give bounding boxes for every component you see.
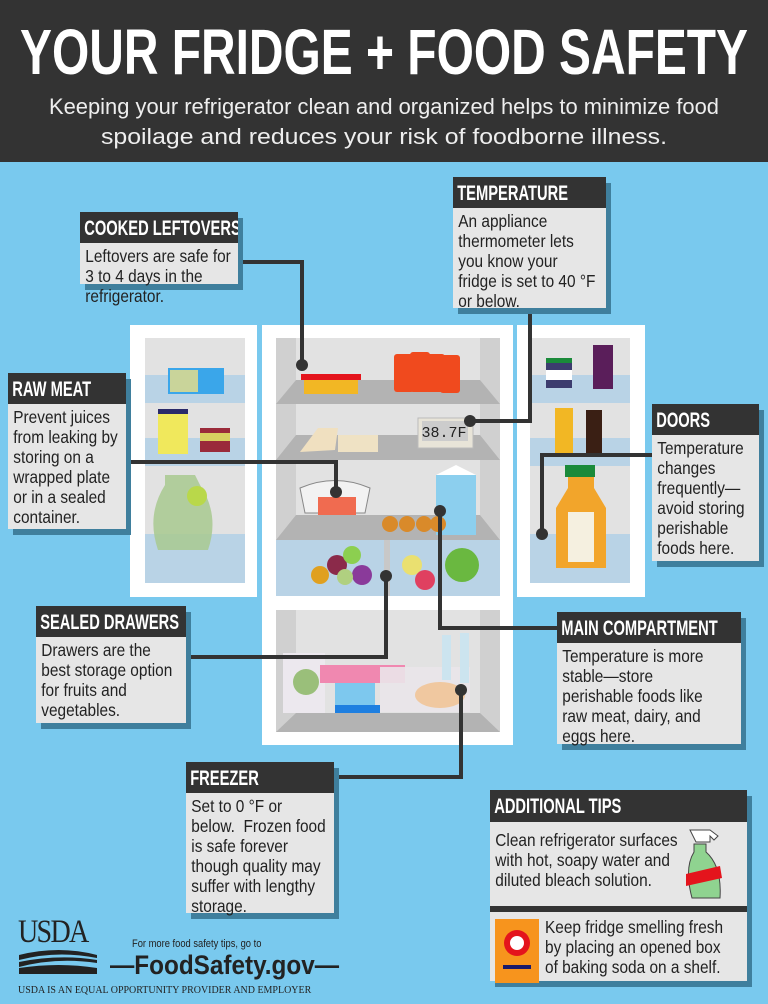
callout: doors: DOORS <box>656 409 710 432</box>
callout: raw meat: from leaking by <box>13 427 118 447</box>
callout: raw meat <box>8 373 126 529</box>
callout: freezer: is safe forever <box>191 836 288 856</box>
tip: cleaning: diluted bleach solution. <box>495 870 652 890</box>
header banner <box>0 0 768 162</box>
title: spoilage and reduces your risk of foodborne illness. <box>101 124 667 149</box>
callout: main compartment: stable—store <box>562 666 653 686</box>
callout: doors: perishable <box>657 518 728 538</box>
title: Keeping your refrigerator clean and organized helps to minimize food <box>49 94 719 119</box>
callout: sealed drawers <box>36 606 186 723</box>
callout: temperature: or below. <box>458 291 520 311</box>
thermometer <box>418 418 473 448</box>
callout: raw meat: storing on a <box>13 447 94 467</box>
callout: temperature: fridge is set to 40 °F <box>458 271 595 291</box>
callout: raw meat: RAW MEAT <box>12 378 91 401</box>
callout: doors: changes <box>657 458 716 478</box>
food items <box>153 345 613 713</box>
callout: sealed drawers: best storage option <box>41 660 172 680</box>
callout: cooked leftovers: 3 to 4 days in the <box>85 266 203 286</box>
title <box>20 16 748 149</box>
callout: doors: Temperature <box>657 438 744 458</box>
FoodSafety.gov link: For more food safety tips, go to <box>132 938 261 950</box>
callout: additional tips: ADDITIONAL TIPS <box>494 795 621 818</box>
tip: cleaning: Clean refrigerator surfaces <box>495 830 678 850</box>
callout: main compartment: raw meat, dairy, and <box>562 706 701 726</box>
callout: sealed drawers: for fruits and <box>41 680 127 700</box>
tip: cleaning: with hot, soapy water and <box>495 850 670 870</box>
USDA logo: USDA <box>18 914 88 950</box>
callout: freezer: though quality may <box>191 856 321 876</box>
callout: main compartment: eggs here. <box>562 726 635 746</box>
icon: spray bottle <box>686 830 722 898</box>
icon: baking soda box <box>495 919 539 983</box>
callout: cooked leftovers: Leftovers are safe for <box>85 246 231 266</box>
callout: raw meat: or in a sealed <box>13 487 106 507</box>
callout: temperature <box>453 177 606 308</box>
callout: cooked leftovers <box>80 212 238 284</box>
callout: temperature: you know your <box>458 251 558 271</box>
USDA logo <box>18 914 97 974</box>
food items: 38.7F <box>421 425 467 442</box>
tip: baking soda: Keep fridge smelling fresh <box>545 917 723 937</box>
callout: doors: avoid storing <box>657 498 745 518</box>
FoodSafety.gov link: —FoodSafety.gov— <box>110 950 339 980</box>
callout: freezer: storage. <box>191 896 247 916</box>
callout: raw meat: Prevent juices <box>13 407 110 427</box>
tip: cleaning <box>495 830 722 898</box>
callout: main compartment: MAIN COMPARTMENT <box>561 617 718 640</box>
callout: doors: frequently— <box>657 478 740 498</box>
callout: sealed drawers: vegetables. <box>41 700 120 720</box>
callout: sealed drawers: SEALED DRAWERS <box>40 611 179 634</box>
callout: temperature: thermometer lets <box>458 231 574 251</box>
footer statement: USDA IS AN EQUAL OPPORTUNITY PROVIDER AND EMPLOYER <box>18 985 311 996</box>
callout: freezer: below. Frozen food <box>191 816 326 836</box>
callout: freezer: suffer with lengthy <box>191 876 315 896</box>
callout: main compartment <box>557 612 741 744</box>
callout: main compartment: perishable foods like <box>562 686 703 706</box>
tip: baking soda <box>495 917 723 983</box>
callout: raw meat: container. <box>13 507 80 527</box>
callout: freezer: Set to 0 °F or <box>191 796 282 816</box>
callout: doors: foods here. <box>657 538 734 558</box>
callout: cooked leftovers: COOKED LEFTOVERS <box>84 217 238 240</box>
callout: freezer: FREEZER <box>190 767 259 790</box>
callout: temperature: An appliance <box>458 211 547 231</box>
callout: sealed drawers: Drawers are the <box>41 640 151 660</box>
tip: baking soda: of baking soda on a shelf. <box>545 957 721 977</box>
callout: raw meat: wrapped plate <box>13 467 110 487</box>
callout: doors <box>652 404 759 561</box>
callout: main compartment: Temperature is more <box>562 646 704 666</box>
callout: additional tips <box>490 790 747 981</box>
text: refrigerator. <box>85 286 164 306</box>
callout: freezer <box>186 762 334 913</box>
tip: baking soda: by placing an opened box <box>545 937 721 957</box>
callout: temperature: TEMPERATURE <box>457 182 568 205</box>
